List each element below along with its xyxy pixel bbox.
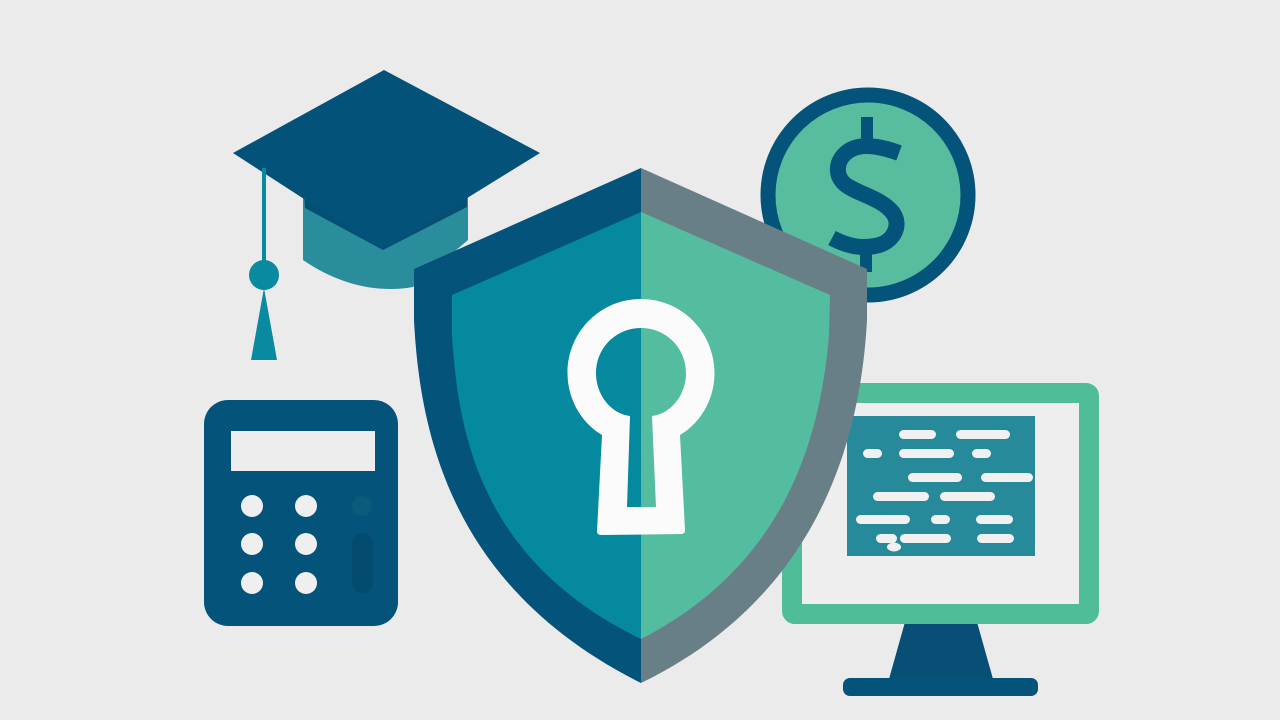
shield left face bbox=[452, 212, 641, 639]
shield left rim bbox=[414, 168, 641, 683]
icon: computer monitor bbox=[792, 393, 1089, 696]
icon: graduation cap bbox=[233, 70, 540, 360]
shield right face bbox=[641, 212, 830, 639]
code lines bbox=[856, 430, 1033, 552]
dollar sign bbox=[832, 117, 899, 272]
icon: calculator bbox=[204, 400, 398, 626]
keyhole bbox=[568, 299, 714, 535]
monitor screen bbox=[847, 416, 1035, 556]
shield right rim bbox=[641, 168, 867, 683]
icon: cap tassel bbox=[249, 168, 279, 360]
icon: dollar coin bbox=[768, 95, 968, 295]
faint calculator keys bbox=[352, 496, 373, 593]
calculator buttons bbox=[241, 495, 317, 594]
monitor frame bbox=[792, 393, 1089, 614]
icon: shield bbox=[414, 168, 867, 683]
monitor base bbox=[843, 678, 1038, 696]
monitor stand bbox=[889, 622, 993, 679]
calculator display bbox=[231, 431, 375, 471]
